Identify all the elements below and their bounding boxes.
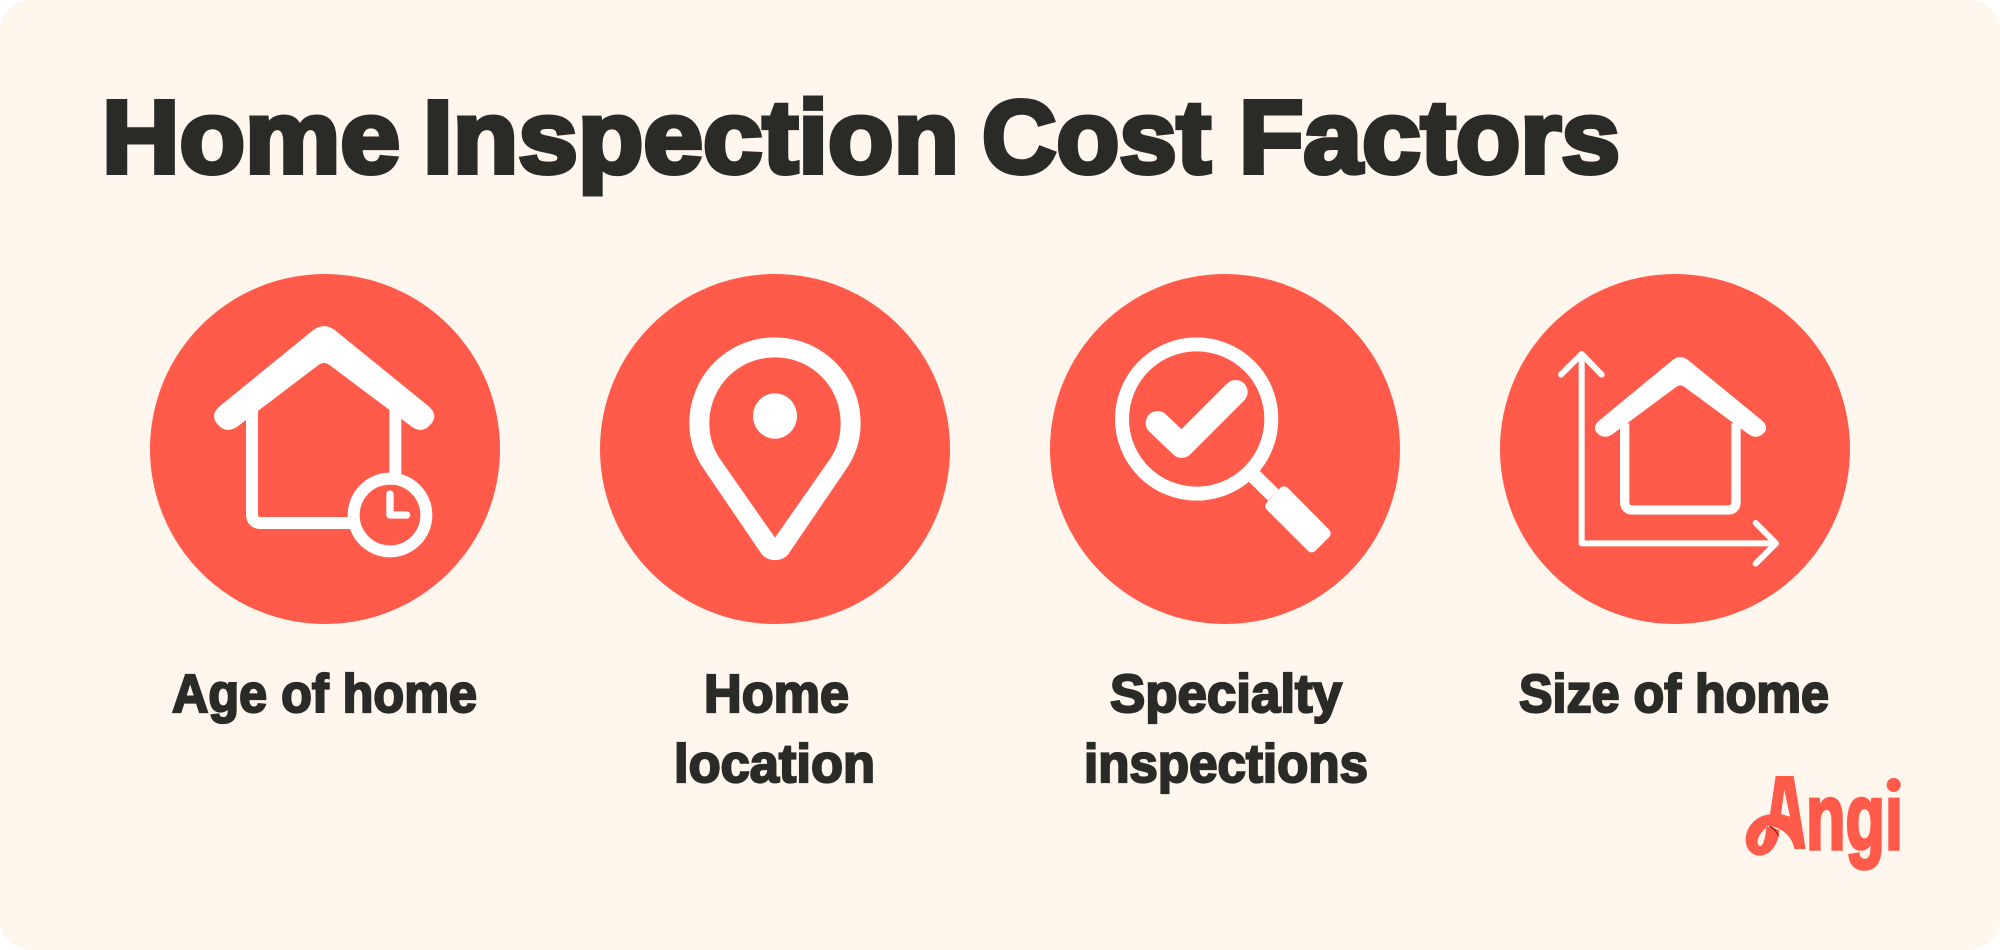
title: Factors	[1239, 80, 1620, 194]
logo: Angi	[1746, 764, 1906, 869]
label: specialty inspections: inspections	[1084, 734, 1368, 794]
circle: size of home	[1500, 274, 1850, 624]
circle: home location	[600, 274, 950, 624]
label: home location	[674, 664, 875, 794]
label: age of home: Age of home	[172, 664, 477, 724]
title	[102, 80, 1620, 194]
panel: specialty inspections	[1050, 274, 1400, 794]
label: home location: location	[674, 734, 875, 794]
label: home location: Home	[704, 664, 849, 724]
label: specialty inspections	[1084, 664, 1368, 794]
label: size of home: Size of home	[1519, 664, 1829, 724]
icon: house with dimension arrows	[1561, 354, 1776, 564]
title: Cost	[982, 80, 1211, 194]
label: specialty inspections: Specialty	[1110, 664, 1342, 724]
title: Inspection	[423, 80, 959, 194]
icon: magnifying glass with check mark	[1122, 344, 1325, 547]
panel: home location	[600, 274, 950, 794]
circle: specialty inspections	[1050, 274, 1400, 624]
logo wordmark: ngi	[1806, 764, 1903, 869]
logo mark: letter A with loop	[1746, 776, 1806, 856]
icon: house with clock	[214, 326, 434, 551]
circle: age of home	[150, 274, 500, 624]
icon: location pin	[689, 337, 861, 560]
logo i dot	[1884, 770, 1906, 795]
title: Home	[102, 80, 400, 194]
panel: size of home	[1500, 274, 1850, 724]
panel: age of home	[150, 274, 500, 724]
